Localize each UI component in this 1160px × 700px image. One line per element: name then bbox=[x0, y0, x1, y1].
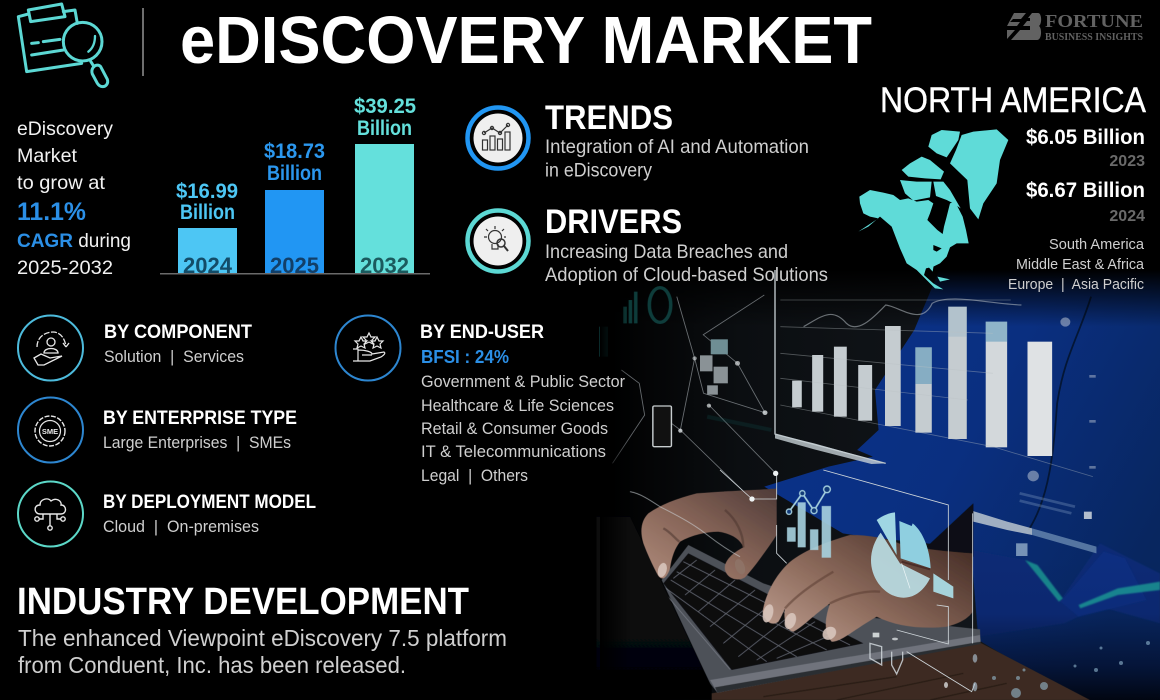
laptop and hands bbox=[597, 488, 1090, 700]
bar 2024: 2024 bbox=[183, 253, 233, 278]
holographic overlay bbox=[630, 470, 977, 692]
left hand finger shading bbox=[663, 510, 743, 547]
text: from Conduent, Inc. has been released. bbox=[18, 652, 406, 678]
bar 2025: $18.73 bbox=[264, 140, 325, 163]
text: trends description: in eDiscovery bbox=[545, 160, 652, 182]
hologram pie chart bbox=[871, 512, 931, 598]
icon: cloud network bbox=[18, 482, 83, 546]
heading: INDUSTRY DEVELOPMENT bbox=[17, 581, 469, 623]
floating data dots bbox=[992, 641, 1150, 698]
text: drivers description bbox=[545, 241, 828, 286]
hologram nodes bbox=[678, 317, 1096, 519]
map: north america bbox=[858, 129, 1008, 289]
value 2023: $6.05 Billion bbox=[1026, 126, 1145, 149]
bar 2032: Billion bbox=[357, 117, 412, 140]
laptop base bbox=[662, 545, 981, 693]
shirt shadow at bottom bbox=[971, 557, 1160, 700]
segment: by deployment model bbox=[18, 482, 316, 546]
value 2023: 2023 bbox=[1109, 153, 1145, 170]
data dots bbox=[973, 654, 977, 691]
heading: trends: TRENDS bbox=[545, 99, 673, 137]
small table bbox=[933, 573, 953, 598]
overlay nodes bbox=[749, 471, 948, 688]
logo: Fortune Business Insights: FORTUNE bbox=[1045, 11, 1143, 31]
panel: trends bbox=[468, 99, 809, 182]
text: The enhanced Viewpoint eDiscovery 7.5 platform bbox=[18, 625, 507, 651]
text: drivers description: Adoption of Cloud-based Solutions bbox=[545, 264, 828, 286]
heading: BY END-USER bbox=[420, 322, 544, 343]
small hologram bar chart bbox=[787, 502, 831, 558]
text: trends description: Integration of AI and Automation bbox=[545, 136, 809, 158]
logo: Fortune Business Insights: BUSINESS INSIGHTS bbox=[1045, 32, 1143, 43]
keyboard bbox=[663, 553, 863, 670]
items: Cloud | On-premises bbox=[103, 518, 259, 536]
text block: market growth bbox=[17, 118, 131, 279]
value 2023 bbox=[1026, 126, 1145, 170]
heading: drivers: DRIVERS bbox=[545, 203, 682, 241]
value 2024: 2024 bbox=[1109, 208, 1145, 225]
text: drivers description: Increasing Data Breaches and bbox=[545, 241, 788, 263]
text block: market growth: 2025-2032 bbox=[17, 257, 113, 279]
text block: market growth: Market bbox=[17, 145, 78, 167]
other regions: Europe | Asia Pacific bbox=[1008, 277, 1144, 293]
items bbox=[421, 372, 625, 485]
icon: SME gear: SME bbox=[42, 427, 58, 436]
heading: BY COMPONENT bbox=[104, 322, 252, 343]
overlay frame lines bbox=[630, 470, 975, 692]
holographic chart bars bbox=[792, 307, 1052, 456]
dark wedge under sleeve bbox=[923, 503, 973, 557]
text bbox=[18, 625, 507, 678]
bar 2032: $39.25 bbox=[354, 95, 416, 118]
shirt bbox=[764, 270, 1160, 700]
white diagonal highlight strips bbox=[775, 434, 1032, 535]
items: Large Enterprises | SMEs bbox=[103, 434, 291, 452]
faint teal gauge bbox=[604, 288, 771, 430]
panel: drivers bbox=[468, 203, 828, 286]
hologram upper lines bbox=[612, 270, 1093, 499]
icon: drivers lightbulb bbox=[468, 210, 528, 272]
text block: market growth: to grow at bbox=[17, 172, 106, 194]
items: Government & Public Sector bbox=[421, 372, 625, 391]
value 2024: $6.67 Billion bbox=[1026, 179, 1145, 202]
bar 2025 bbox=[264, 140, 325, 278]
bar 2032 bbox=[354, 95, 416, 278]
segment: by end-user bbox=[336, 316, 625, 485]
bar 2032: 2032 bbox=[360, 253, 409, 278]
items: Legal | Others bbox=[421, 466, 528, 485]
items: Retail & Consumer Goods bbox=[421, 419, 608, 438]
logo: Fortune Business Insights bbox=[1007, 11, 1143, 43]
text: trends description bbox=[545, 136, 809, 182]
left fade bbox=[600, 270, 630, 700]
laptop lid bbox=[597, 517, 712, 700]
bar 2024: $16.99 bbox=[176, 180, 238, 203]
panel: north america bbox=[858, 81, 1147, 293]
value 2024 bbox=[1026, 179, 1145, 225]
fingernails bbox=[656, 558, 839, 643]
bar tint bbox=[915, 307, 1007, 384]
right hand bbox=[763, 535, 973, 642]
items: IT & Telecommunications bbox=[421, 442, 606, 461]
small hologram line bbox=[789, 489, 827, 512]
pale UI box on shirt bbox=[1016, 543, 1027, 556]
tablet icon bbox=[653, 406, 671, 447]
items: Healthcare & Life Sciences bbox=[421, 396, 614, 415]
heading: BY ENTERPRISE TYPE bbox=[103, 408, 297, 429]
photo: hands typing on laptop with holographic charts bbox=[597, 270, 1160, 700]
divider bbox=[142, 8, 144, 76]
text block: market growth: eDiscovery bbox=[17, 118, 113, 140]
bar chart: market size bbox=[160, 95, 430, 278]
highlight: BFSI : 24% bbox=[421, 347, 509, 367]
bar 2025: Billion bbox=[267, 162, 322, 185]
desk bbox=[712, 640, 1090, 700]
top fade of photo background bbox=[600, 270, 1160, 327]
icon: SME gear bbox=[18, 398, 83, 462]
fold of shirt cuff bbox=[971, 543, 1160, 637]
left hand bbox=[641, 488, 777, 579]
sleeve glow bbox=[1025, 560, 1160, 608]
icon: clipboard with magnifier bbox=[18, 4, 108, 87]
other regions: Middle East & Africa bbox=[1016, 257, 1145, 273]
segment: by component bbox=[18, 316, 252, 380]
shirt seam bbox=[1029, 297, 1091, 530]
icon: trends chart bbox=[468, 108, 528, 168]
icon: person in cycle over hand bbox=[18, 316, 83, 380]
heading: BY DEPLOYMENT MODEL bbox=[103, 492, 316, 513]
text block: market growth: 11.1% bbox=[17, 198, 86, 226]
segment: by enterprise type bbox=[18, 398, 297, 462]
bar 2025: 2025 bbox=[270, 253, 319, 278]
title: eDISCOVERY MARKET bbox=[180, 3, 872, 78]
bar 2024: Billion bbox=[180, 201, 235, 224]
items: Solution | Services bbox=[104, 348, 244, 366]
right hand finger shading bbox=[785, 572, 880, 608]
icon: stars over hand bbox=[336, 316, 400, 380]
flow chart blocks bbox=[700, 339, 728, 395]
text block: market growth: CAGR during bbox=[17, 230, 131, 252]
other regions bbox=[1008, 237, 1145, 293]
bar 2024 bbox=[176, 180, 238, 278]
panel: industry development bbox=[17, 581, 507, 678]
other regions: South America bbox=[1049, 237, 1145, 253]
